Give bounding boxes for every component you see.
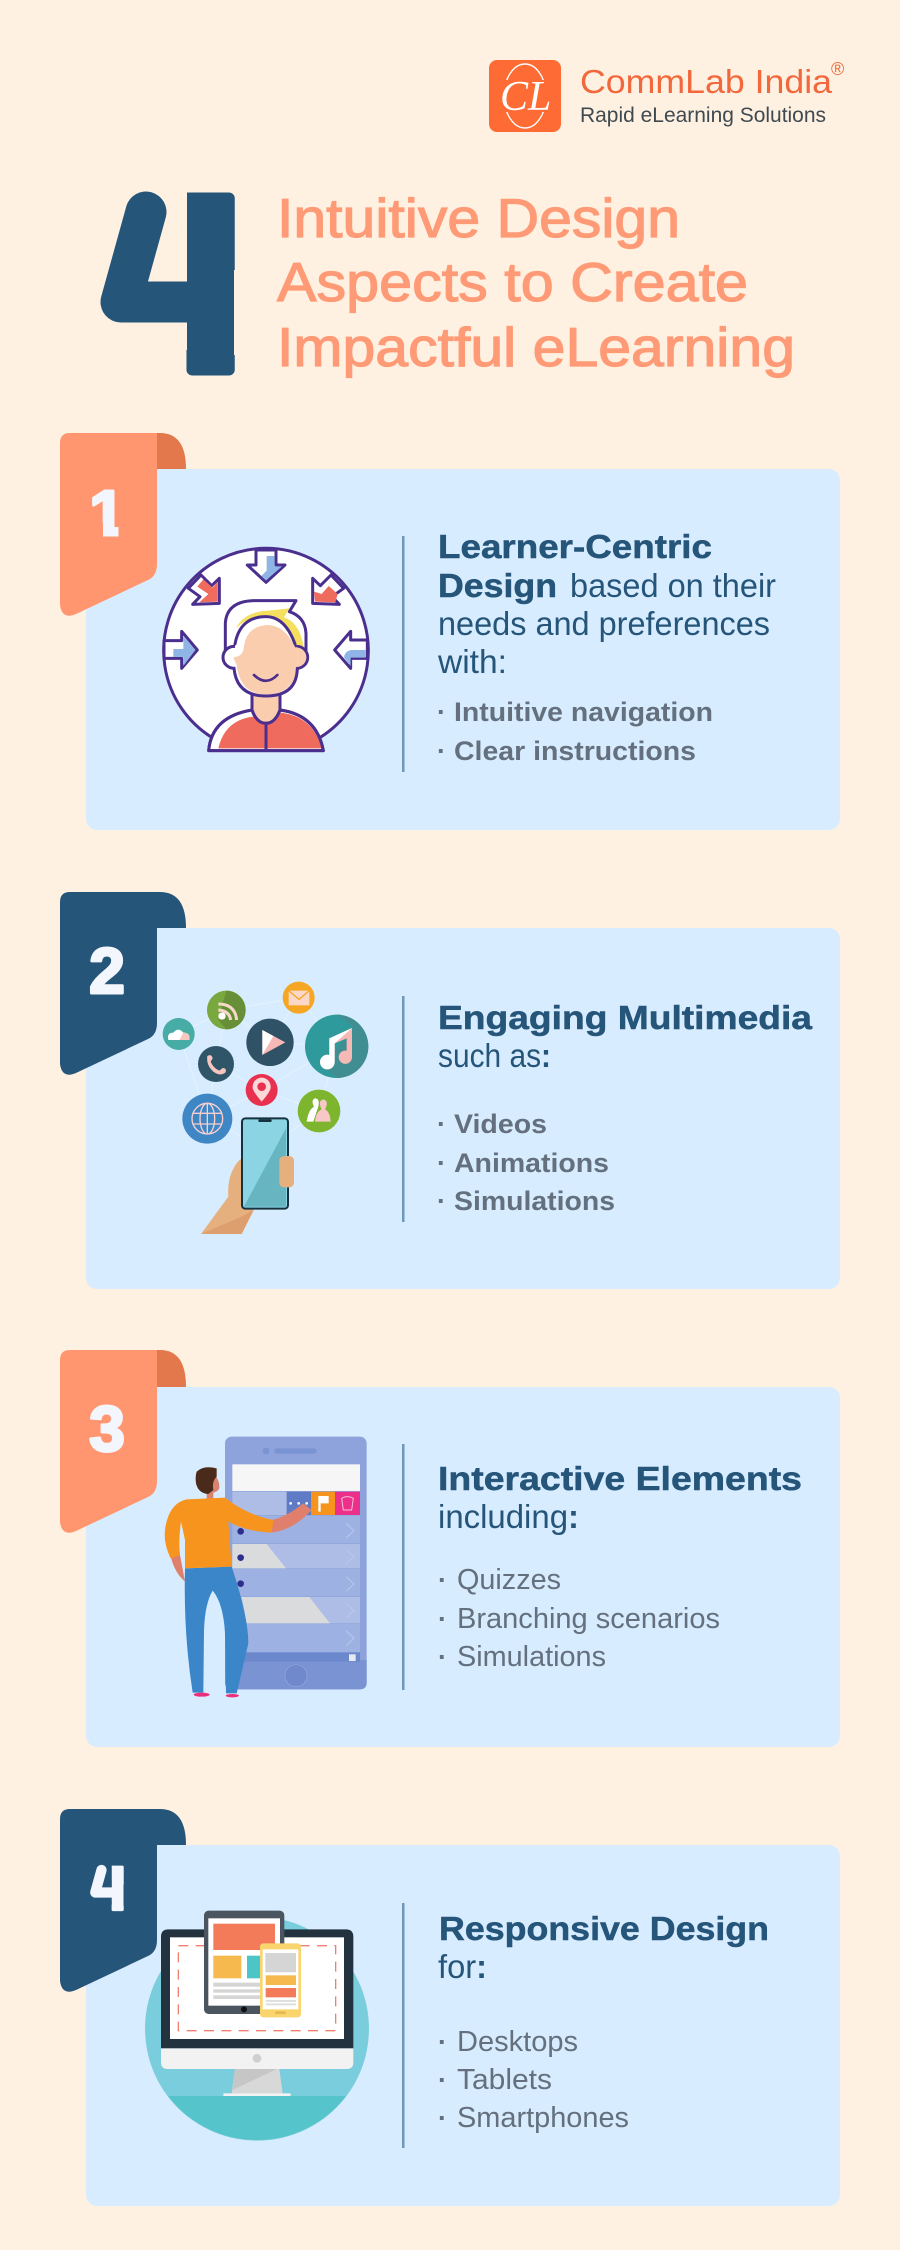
heading text: Engaging Multimedia [438,999,813,1036]
bullet list: · [437,736,446,766]
phone body [225,1437,367,1689]
bullet list: Branching scenarios [457,1603,720,1635]
mail bubble [283,982,315,1014]
heading text: Design [438,567,557,604]
rss bubble [207,991,246,1029]
heading text [437,528,776,680]
bullet list: · [438,2027,447,2057]
panel: 4 responsive design [60,1809,840,2206]
heading text [438,1910,769,1985]
heading text [438,999,813,1074]
panel: 1 learner-centric design [60,433,840,830]
logo tagline: Rapid eLearning Solutions [580,104,826,127]
ribbon with number 2: 2 [89,935,125,1007]
teal circle [145,1917,369,2141]
bullet list: Quizzes [457,1564,561,1596]
title: Aspects to Create [277,251,748,313]
music bubble [305,1015,368,1078]
icon: learner with arrows [164,548,368,751]
monitor [161,1929,353,2048]
big number 4: 4 [102,144,257,423]
bullet list: Videos [454,1109,547,1139]
heading text: with: [437,643,507,680]
icon: responsive devices [145,1911,369,2141]
logo: CommLab India [489,59,844,132]
ears [223,646,245,668]
bullet list: Simulations [457,1641,606,1673]
ribbon with number 1: 1 [89,477,125,549]
divider [402,996,404,1222]
logo mark [489,60,561,132]
bullet list: · [437,1186,446,1216]
ribbon with number 1 [60,433,186,616]
bullet list: Smartphones [457,2102,629,2134]
divider [402,1903,404,2148]
card background [86,469,840,830]
divider [402,1444,404,1690]
icon: phone with multimedia bubbles [163,982,368,1234]
title [277,187,795,378]
heading text [438,1460,802,1535]
ribbon with number 3: 3 [89,1393,125,1465]
heading text: Responsive Design [439,1910,769,1947]
person [207,1492,213,1500]
heading text: Learner-Centric [438,528,712,565]
title: Intuitive Design [277,187,680,249]
location pin bubble [246,1074,278,1106]
people bubble [298,1090,340,1132]
phone [242,1118,288,1209]
bullet list: · [437,1148,446,1178]
card background [86,1387,840,1747]
face [235,617,297,696]
logo name: CommLab India [580,63,833,100]
ribbon with number 4: 4 [90,1853,129,1923]
hair [225,601,306,653]
bullet list: Tablets [457,2064,552,2096]
bullet list: · [437,1109,446,1139]
heading text: for: [438,1948,487,1985]
phone call bubble [198,1046,234,1082]
logo mark: CL [500,74,551,120]
bullet list [437,1109,615,1216]
heading text: needs and preferences [438,605,770,642]
title: Impactful eLearning [277,316,795,378]
ribbon with number 2 [60,892,186,1075]
bullet list [437,697,713,766]
bullet list [438,1564,720,1673]
bullet list: Clear instructions [454,736,696,766]
bullet list: Animations [454,1148,609,1178]
ribbon with number 4 [60,1809,186,1992]
bullet list: · [438,2065,447,2095]
divider [402,536,404,772]
fingers [279,1156,294,1187]
bullet list: · [437,697,446,727]
registered mark: ® [831,59,844,79]
bullet list: Intuitive navigation [454,697,713,727]
bullet list: · [438,1604,447,1634]
bullet list: · [438,2103,447,2133]
heading text: based on their [570,567,776,604]
icon: person using a giant phone [165,1437,367,1697]
panel: 3 interactive elements [60,1350,840,1747]
play bubble [246,1019,294,1066]
card background [86,928,840,1289]
panel: 2 engaging multimedia [60,892,840,1289]
tablet [204,1911,284,2014]
card background [86,1845,840,2206]
cloud bubble [163,1018,195,1050]
bullet list: · [438,1642,447,1672]
heading text: such as: [438,1037,551,1074]
neck [252,692,280,723]
ribbon with number 3 [60,1350,186,1533]
heading text: including: [438,1498,579,1535]
bullet list: Desktops [457,2026,578,2058]
bullet list: Simulations [454,1186,615,1216]
smartphone [260,1943,301,2017]
hand back [201,1159,257,1234]
heading text: Interactive Elements [438,1460,802,1497]
bullet list: · [438,1565,447,1595]
bullet list [438,2026,629,2134]
globe bubble [182,1094,232,1144]
body [209,710,323,751]
